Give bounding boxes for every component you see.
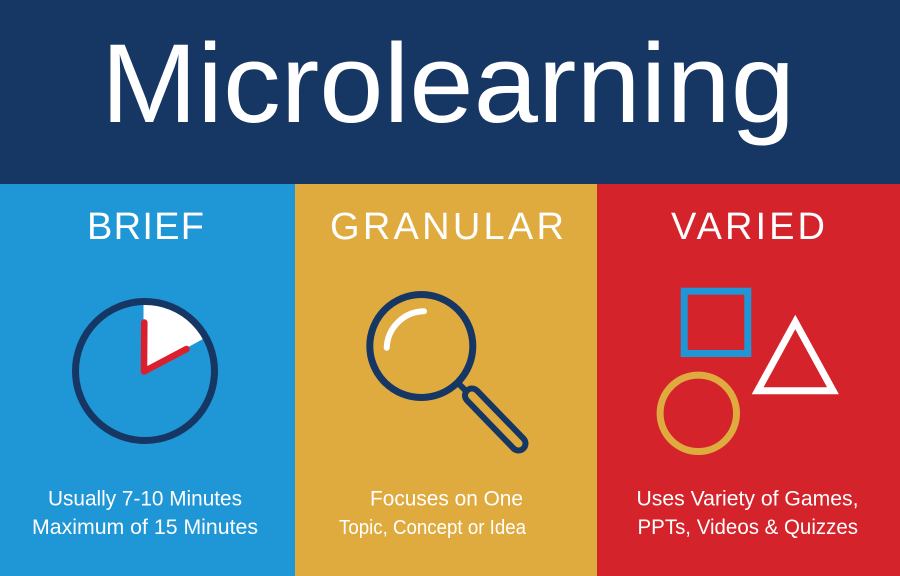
caption: brief: Usually 7-10 Minutes [48,486,242,510]
caption: brief [32,486,258,539]
caption: varied [636,486,858,539]
icon: circle [660,375,736,451]
caption: brief: Maximum of 15 Minutes [32,515,258,539]
caption: granular [339,488,527,539]
heading: granular: GRANULAR [330,206,564,248]
icon: magnifying glass [370,294,518,444]
caption: varied: Uses Variety of Games, [636,486,858,510]
panel: varied [597,184,900,576]
caption: varied: PPTs, Videos & Quizzes [638,515,858,539]
panel: brief [0,184,295,576]
caption: granular: Focuses on One [370,488,523,510]
icon: square [684,291,748,354]
heading: varied: VARIED [671,206,825,248]
panel: granular [295,184,597,576]
icon: shapes [660,291,833,451]
icon: clock [76,302,214,440]
icon: triangle [758,322,833,391]
caption: granular: Topic, Concept or Idea [339,516,527,539]
heading: brief: BRIEF [87,206,204,248]
title: Microlearning [101,21,795,146]
